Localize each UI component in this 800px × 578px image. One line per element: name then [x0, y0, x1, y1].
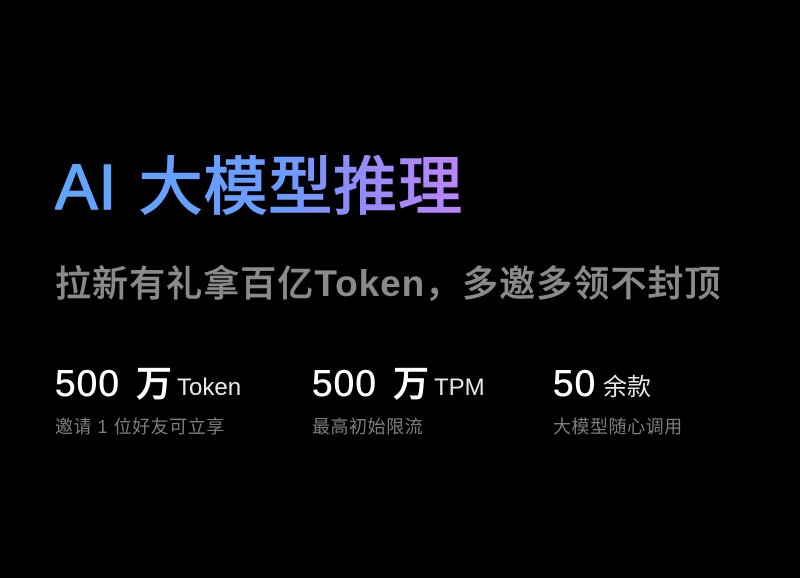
description: 最高初始限流 — [312, 417, 423, 437]
subtitle: 拉新有礼拿百亿Token，多邀多领不封顶 — [55, 263, 721, 304]
unit label: Token — [177, 374, 241, 401]
unit label: TPM — [434, 374, 485, 401]
value: 50 — [553, 363, 596, 404]
unit label: 余款 — [603, 374, 651, 401]
description: 大模型随心调用 — [553, 417, 683, 437]
stat: 500 万 Token — [55, 363, 241, 437]
value unit: 万 — [136, 363, 173, 404]
value: 500 — [55, 363, 120, 404]
description: 邀请 1 位好友可立享 — [55, 417, 225, 437]
stat: 500 万 TPM — [312, 363, 485, 437]
stat: 50 余款 — [553, 363, 683, 437]
value: 500 — [312, 363, 377, 404]
title: AI 大模型推理 — [55, 151, 463, 223]
value unit: 万 — [393, 363, 430, 404]
